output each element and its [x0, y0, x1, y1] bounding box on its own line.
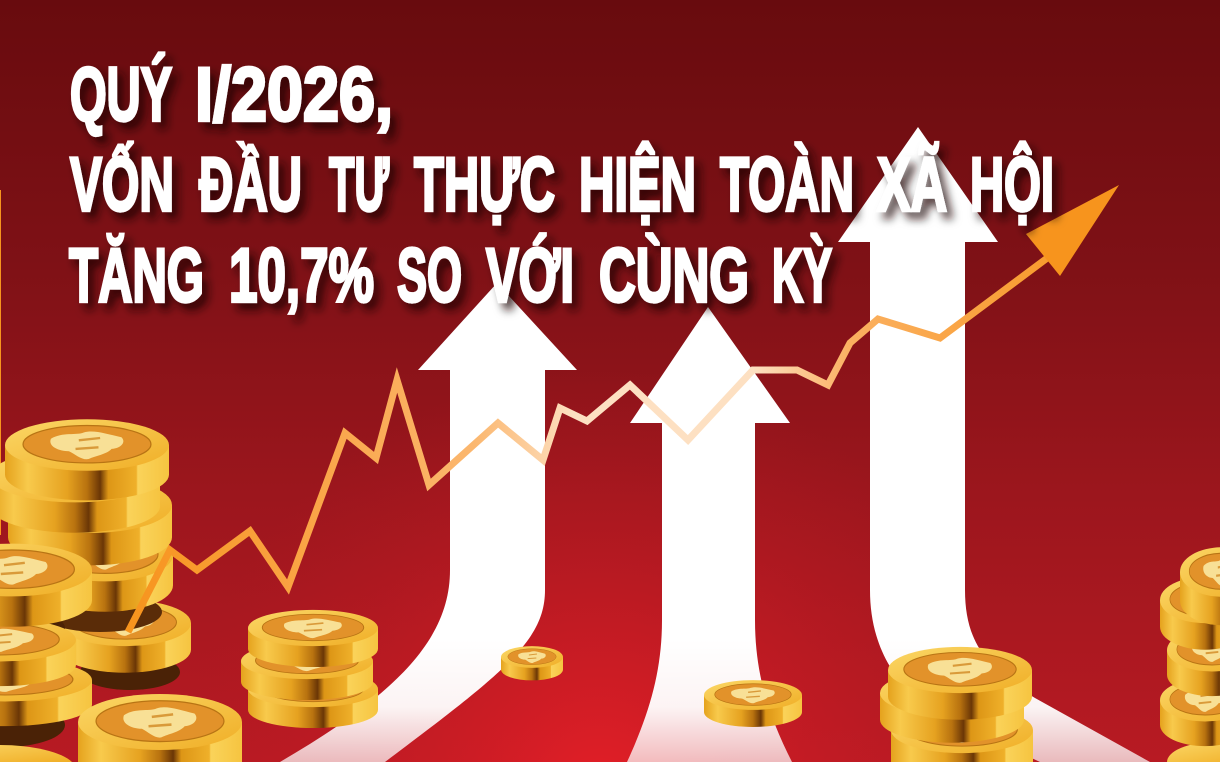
coins: right edge stack — [1160, 547, 1220, 762]
title line 2: THỰC — [414, 142, 555, 228]
arrow: left white arrow — [280, 283, 577, 762]
arrow: middle white arrow — [627, 307, 792, 762]
title — [69, 52, 1054, 318]
title line 1 — [70, 52, 393, 138]
coins: left stacks — [0, 419, 242, 762]
title line 2: TƯ — [329, 142, 390, 228]
coin: centre coin — [704, 680, 802, 727]
title line 2: XÃ — [877, 142, 947, 228]
title line 2: HỘI — [970, 142, 1054, 228]
title line 3: SO — [397, 234, 462, 318]
arrow: right white arrow — [838, 127, 1150, 762]
coins: centre-left stack — [241, 610, 378, 728]
coin: small centre coin — [501, 646, 563, 680]
title line 1: I/2026, — [195, 52, 393, 138]
title line 3: 10,7% — [229, 234, 374, 318]
title line 2: VỐN — [70, 142, 174, 228]
chart: rising orange line with arrowhead — [128, 185, 1119, 632]
title line 3: TĂNG — [69, 234, 204, 318]
title line 3: KỲ — [772, 234, 832, 318]
title line 2: TOÀN — [720, 142, 854, 228]
title line 2: HIỆN — [579, 142, 696, 228]
title line 2: ĐẦU — [199, 142, 302, 228]
coins: centre-right stack — [880, 647, 1033, 762]
title line 1: QUÝ — [70, 52, 172, 138]
title line 3: CÙNG — [599, 234, 749, 318]
title line 3 — [69, 234, 832, 318]
title line 2 — [70, 142, 1054, 228]
title line 3: VỚI — [486, 234, 574, 318]
